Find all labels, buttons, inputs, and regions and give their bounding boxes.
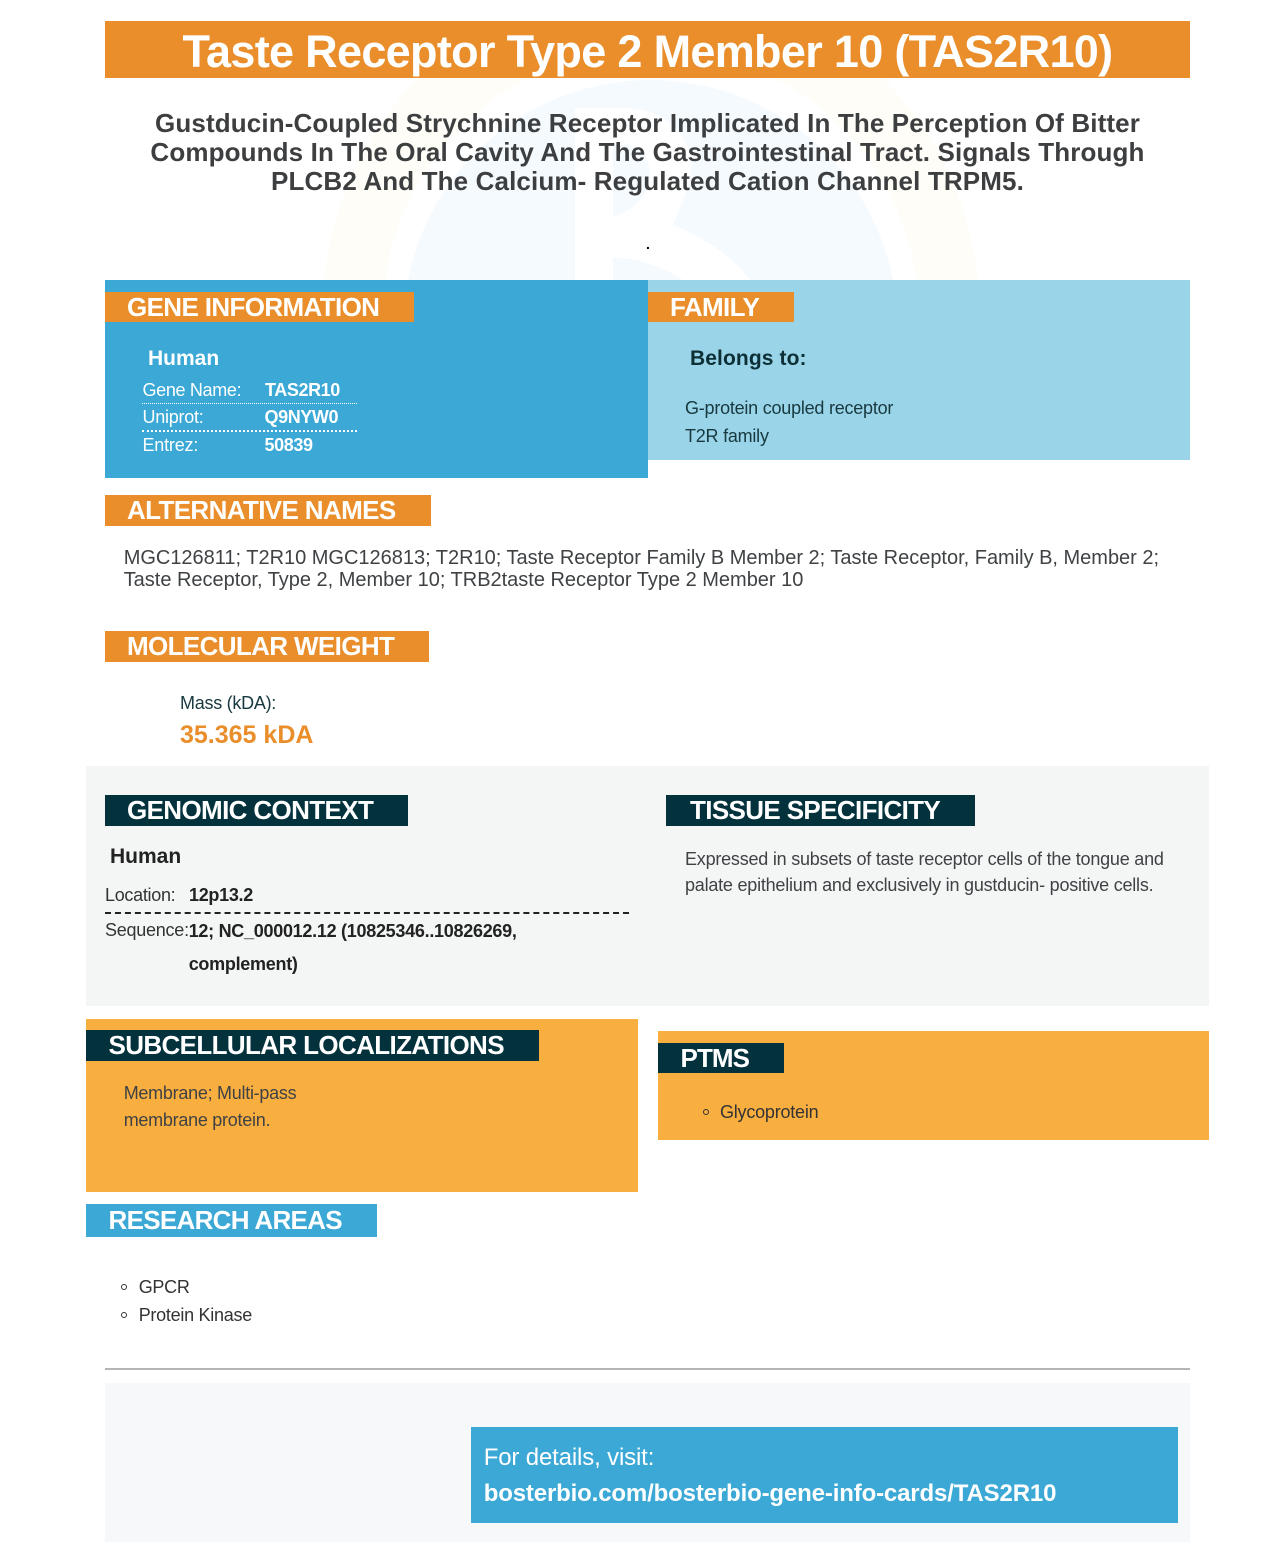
gene fields: TAS2R10 [265,380,340,400]
panel: genomic context and tissue specificity [86,766,1209,1006]
dot: . [646,236,650,252]
research areas list: Protein Kinase [139,1305,252,1325]
genomic fields: 12; NC_000012.12 (10825346..10826269, [189,921,517,941]
tissue specificity text: palate epithelium and exclusively in gustducin- positive cells. [685,875,1153,895]
heading: genomic context: GENOMIC CONTEXT [127,795,373,825]
alternative names text [124,547,1159,591]
family list: T2R family [685,426,769,446]
gene fields [142,380,357,455]
genomic fields [105,885,629,974]
subcellular text: Membrane; Multi-pass [124,1083,296,1103]
panel: family [648,280,1190,460]
subcellular text [124,1083,296,1130]
mass value: 35.365 kDA [180,721,313,749]
alternative names text: MGC126811; T2R10 MGC126813; T2R10; Taste Receptor Family B Member 2; Taste Receptor, Family B, Member 2; [124,547,1159,569]
watermark logo [408,80,893,280]
tissue specificity text: Expressed in subsets of taste receptor cells of the tongue and [685,849,1164,869]
genomic fields: Sequence: [105,920,189,940]
heading: gene information: GENE INFORMATION [127,292,379,322]
heading: family: FAMILY [670,292,759,322]
alternative names text: Taste Receptor, Type 2, Member 10; TRB2taste Receptor Type 2 Member 10 [124,569,803,591]
gene fields: Gene Name: [142,380,241,400]
gene fields: Q9NYW0 [264,407,338,427]
callout: details link [471,1427,1178,1523]
heading: research areas: RESEARCH AREAS [108,1205,342,1235]
subtitle [150,108,1145,196]
species: Human [110,845,181,868]
ptms list item: Glycoprotein [720,1102,818,1122]
genomic fields: Location: [105,885,175,905]
panel: gene information [105,280,648,478]
subtitle: Gustducin-Coupled Strychnine Receptor Implicated In The Perception Of Bitter [155,108,1140,138]
family list [685,398,894,446]
callout label: For details, visit: [484,1444,654,1471]
footer panel [105,1383,1190,1542]
heading: subcellular localizations: SUBCELLULAR LOCALIZATIONS [108,1030,504,1060]
gene fields: Uniprot: [142,407,204,427]
tissue specificity text [685,849,1164,895]
panel: ptms [658,1031,1209,1140]
species: Human [148,347,219,370]
heading: tissue specificity: TISSUE SPECIFICITY [690,795,940,825]
heading: molecular weight: MOLECULAR WEIGHT [127,631,394,661]
genomic fields: complement) [189,954,298,974]
subcellular text: membrane protein. [124,1110,270,1130]
panel: subcellular localizations [86,1019,638,1192]
genomic fields: 12p13.2 [189,885,253,905]
mass label: Mass (kDA): [180,693,276,713]
heading: ptms: PTMS [680,1043,749,1073]
belongs to label: Belongs to: [690,347,807,370]
family list: G-protein coupled receptor [685,398,893,418]
gene fields: 50839 [264,435,313,455]
heading: alternative names: ALTERNATIVE NAMES [127,495,396,525]
research areas list: GPCR [139,1277,190,1297]
callout url: bosterbio.com/bosterbio-gene-info-cards/TAS2R10 [484,1480,1056,1507]
gene fields: Entrez: [142,435,198,455]
heading: family [648,292,794,322]
heading: ptms [658,1043,784,1073]
research areas list [121,1277,252,1325]
title banner: Taste Receptor Type 2 Member 10 (TAS2R10) [183,26,1112,77]
subtitle: Compounds In The Oral Cavity And The Gastrointestinal Tract. Signals Through [150,137,1145,167]
subtitle: PLCB2 And The Calcium- Regulated Cation Channel TRPM5. [271,166,1024,196]
